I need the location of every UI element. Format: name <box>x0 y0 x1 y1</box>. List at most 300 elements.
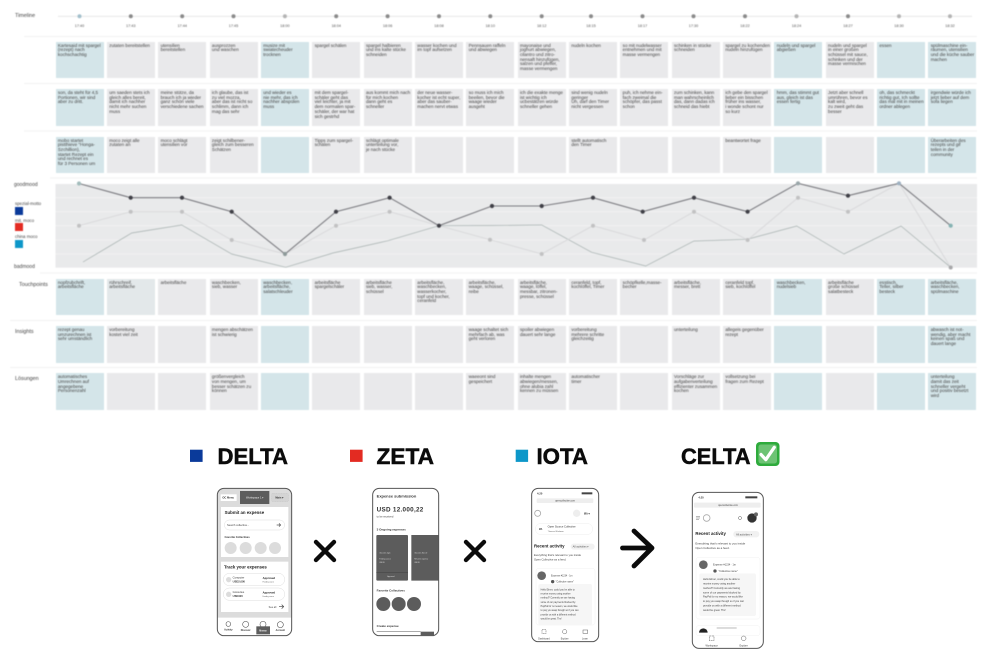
card 18: Überarbeiten des <box>931 138 966 142</box>
card 10: ucbestätzen würde <box>520 99 558 104</box>
card 8 <box>415 136 463 173</box>
card 9 <box>466 373 514 410</box>
card 1: aber zu dritt. <box>58 99 83 104</box>
card 8: kocher ist echt super, <box>417 95 460 100</box>
phone: DELTA: Track your expenses <box>224 565 267 570</box>
card 16: besser <box>828 109 842 114</box>
card 10: joghurt abwiegen, <box>520 47 556 52</box>
card 13: effizienter zusammen <box>674 384 717 389</box>
card 10: nensaft hinzufügen, <box>520 57 560 62</box>
phone: ZETA <box>373 488 439 636</box>
card 4: können <box>212 388 227 393</box>
card 14: so kurz <box>725 109 740 114</box>
card 15: hmm, das stimmt gut <box>777 90 819 95</box>
card 4: ist schwierig <box>212 332 237 337</box>
card 17 <box>877 326 925 362</box>
card 8 <box>415 42 463 78</box>
card 1: mobo startet <box>58 138 83 142</box>
card 9: reibe <box>469 289 479 294</box>
card 1: Personenzahl <box>58 388 86 393</box>
phone: DELTA: Main ▾ <box>275 496 284 500</box>
phone: IOTA: some of our payments blocked by <box>541 601 576 604</box>
card 18: keinen spaß und <box>931 336 964 341</box>
phone: ZETA: Expense submission <box>377 494 417 499</box>
timeline: 17:40 <box>75 24 84 28</box>
card 6: spargel schälen <box>315 42 346 48</box>
card 1 <box>56 373 104 410</box>
label: china moco: china moco <box>15 234 37 238</box>
row: actions <box>56 42 976 78</box>
phone: DELTA: Favorite Collectives <box>225 535 250 539</box>
card 7: arbeitsfläche <box>366 280 392 284</box>
phone: CELTA: 4:20 <box>698 495 704 499</box>
card 11: nudeln kochen <box>571 42 601 48</box>
card 1: sehr umständlich <box>58 336 92 341</box>
heading: DELTA: DELTA <box>218 444 288 469</box>
card 14: fragen zum Rezept <box>725 379 764 384</box>
card 2 <box>107 278 155 315</box>
timeline: 18:32 <box>945 24 955 28</box>
card 4: größenvergleich <box>212 374 245 379</box>
phone: DELTA: Approved <box>263 591 275 595</box>
card 4: ausprozzen <box>212 42 235 48</box>
phone: IOTA: Learn <box>582 638 589 641</box>
card 14: vollsetzung bei <box>725 374 755 379</box>
phone: DELTA: Submit an expense <box>225 510 265 515</box>
card 18: jetzt lieber auf dem <box>931 95 969 100</box>
card 18: und die küche sauber <box>931 52 974 57</box>
card 4: von mengen, um <box>212 379 246 384</box>
label: badmood: badmood <box>14 264 35 270</box>
phone: CELTA: provide us with a different method <box>703 605 741 608</box>
phone: IOTA: ØΛ ▾ <box>584 511 591 515</box>
card 10 <box>518 136 566 173</box>
card 16 <box>826 136 874 173</box>
phone: DELTA: Activity <box>224 629 233 632</box>
card 18: damit das zeit <box>931 379 959 384</box>
card 7: für mich kochen <box>366 95 398 100</box>
card 7: schneiden <box>366 52 387 57</box>
card 17: besteck <box>879 289 895 294</box>
card 5 <box>261 89 309 126</box>
card 11 <box>569 373 617 410</box>
card 12: schöpfer, das passt <box>623 99 662 104</box>
card 3: meine stütze, da <box>161 90 194 95</box>
card 14: i wonde schont nur <box>725 104 764 109</box>
card 11: stellt automatisch <box>571 138 606 142</box>
phone: DELTA: Money <box>259 630 267 632</box>
card 12 <box>620 278 668 315</box>
card 8 <box>415 278 463 315</box>
card 3: arbeitsfläche <box>161 280 186 284</box>
phone: ZETA: USD20 <box>414 562 420 564</box>
line: spezial motto <box>77 181 953 256</box>
card 2: moco zeigt alle <box>109 138 140 142</box>
card 3 <box>158 278 206 315</box>
phone: DELTA: Groceries <box>233 590 245 594</box>
card 4: mengen abschätzen <box>212 327 253 332</box>
card 5 <box>261 136 309 173</box>
journey map <box>14 12 977 410</box>
card 17: ordner ablegen <box>879 104 910 109</box>
card 11 <box>569 278 617 315</box>
card 8: wasserkocher, <box>417 289 446 294</box>
card 9: geht verloren <box>469 336 495 341</box>
card 13 <box>672 89 720 126</box>
concept variants <box>190 442 780 649</box>
card 16 <box>826 42 874 78</box>
timeline: 17:30 <box>689 24 698 28</box>
timeline: 18:22 <box>740 24 750 28</box>
card 12: masse vermengen <box>623 52 660 57</box>
card 16: umrühren, bevor es <box>828 95 867 100</box>
card 6: schälen <box>315 142 330 147</box>
card 1: kochschachtig <box>58 52 87 57</box>
phone: IOTA: receive money using another <box>541 592 571 595</box>
card 2: kostet viel zeit <box>109 332 138 337</box>
card 4: mag das sehr <box>212 109 239 114</box>
card 10 <box>518 278 566 315</box>
card 5: arbeitsfläche, <box>263 284 290 289</box>
card 18: irgendwie würde ich <box>931 90 971 95</box>
card 7 <box>364 136 412 173</box>
card 17: richtig gut, Ich sollte <box>879 95 920 100</box>
phone: DELTA: USD2,000 <box>233 580 245 584</box>
phone: CELTA: receive money using another <box>703 582 735 585</box>
card 18: schneller vergeht <box>931 384 965 389</box>
card 3: brauch ich ja wieder <box>161 95 201 100</box>
timeline: 18:00 <box>280 24 290 28</box>
card 13 <box>672 136 720 173</box>
card 16: in einer großen <box>828 47 859 52</box>
phone: CELTA: opencollective.com <box>718 504 738 507</box>
label: Touchpoints: Touchpoints <box>19 282 48 288</box>
card 2: um saeden stets ich <box>109 90 150 95</box>
phone: ZETA: Approved <box>387 575 395 578</box>
phone: CELTA: method? Currently we are having <box>703 587 741 590</box>
row: assistant <box>56 136 976 174</box>
phone: DELTA: Funding source <box>263 596 274 598</box>
card 16: große schüssel <box>828 284 859 289</box>
card 4: zeigt schilbener- <box>212 138 245 142</box>
card 9: so muss ich mich <box>469 90 504 95</box>
card 13: aufgabenverteilung <box>674 379 713 384</box>
card 16: schinken und der <box>828 57 863 62</box>
card 3 <box>158 42 206 78</box>
card 9: arbeitsfläche, <box>469 280 496 284</box>
card 12: so mit nudelwasser <box>623 42 662 48</box>
card 18: dauert lange <box>931 341 956 346</box>
card 15: aus, gleich ist das <box>777 95 813 100</box>
phone: IOTA: 4:20 <box>537 491 543 495</box>
card 10: arbeitsfläche, <box>520 280 547 284</box>
card 5: und wieder es <box>263 90 292 95</box>
card 4 <box>210 373 258 410</box>
heading: ZETA: ZETA <box>376 444 434 469</box>
card 18: teilen in der <box>931 147 954 152</box>
card 9 <box>466 42 514 78</box>
card 8: aber das sauber- <box>417 99 452 104</box>
card 5: waschbecken, <box>263 280 292 284</box>
card 1: und rechnet es <box>58 156 88 161</box>
card 5 <box>261 373 309 410</box>
phone: DELTA <box>217 488 292 636</box>
card 1: (rezept) nach <box>58 47 85 52</box>
phone: CELTA: Recent activity <box>695 531 726 536</box>
card 8: arbeitsfläche, <box>417 280 444 284</box>
card 2 <box>107 326 155 362</box>
card 7: je nach stücke <box>366 147 395 152</box>
phone: ZETA: Create expense <box>377 624 399 628</box>
card 14 <box>723 89 771 126</box>
card 6: dem normalen spar- <box>315 104 355 109</box>
card 10: ist wichtig ich <box>520 95 547 100</box>
card 16: masse vermischen <box>828 61 866 66</box>
card 16 <box>826 373 874 410</box>
phone: DELTA: Computer <box>233 576 244 580</box>
card 13: arbeitsfläche, <box>674 280 701 284</box>
card 10: kennen zu müssen <box>520 388 558 393</box>
label: Timeline: Timeline <box>15 13 35 19</box>
heading: IOTA: IOTA <box>536 444 588 469</box>
legend swatch: delta <box>15 207 23 215</box>
card 9: ausgeht <box>469 104 485 109</box>
card 10 <box>518 326 566 362</box>
card 16: salatbesteck <box>828 289 853 294</box>
card 2: vorbereitung <box>109 327 135 332</box>
heading: CELTA: CELTA <box>681 444 751 469</box>
card 13: das, dann dadas ich <box>674 99 715 104</box>
card 12 <box>620 136 668 173</box>
card 16: kalt wird, <box>828 99 846 104</box>
card 4 <box>210 136 258 173</box>
timeline: 18:24 <box>792 24 801 28</box>
phone: ZETA: to be received <box>377 514 394 518</box>
card 2 <box>107 89 155 126</box>
phone: IOTA: Open Collective as a feed. <box>534 558 566 562</box>
card 1 <box>56 89 104 126</box>
card 10: messbar, zitronen- <box>520 289 557 294</box>
label: mit moco: mit. moco <box>15 218 34 222</box>
card 8: machen nervt etwas <box>417 104 458 109</box>
heading: ZETA <box>350 444 434 469</box>
card 11 <box>569 42 617 78</box>
card 14: früher ins wasser, <box>725 99 761 104</box>
phone: CELTA: Expense #1234 · 1m <box>713 564 736 567</box>
timeline: 18:06 <box>383 24 392 28</box>
card 18: sofa liegen <box>931 99 953 104</box>
phone: IOTA: provide us with a different method <box>541 613 576 616</box>
phone: CELTA <box>692 492 763 648</box>
card 18: arbeitsfläche, <box>931 280 958 284</box>
label: Insights: Insights <box>15 329 34 335</box>
card 5 <box>261 278 309 315</box>
card 10: abwiegen/messen, <box>520 379 558 384</box>
phone: IOTA: Explore <box>561 638 569 641</box>
card 13: unterteilung <box>674 327 698 332</box>
card 3: utensilien <box>161 42 180 48</box>
card 4: sieb, wasser <box>212 284 237 289</box>
card 18: spülmaschine <box>931 289 959 294</box>
card 2: rührschreif, <box>109 280 132 284</box>
card 15 <box>774 326 822 362</box>
card 7 <box>364 278 412 315</box>
card 1: nopfzubchrift, <box>58 280 85 284</box>
card 12: schon <box>623 104 635 109</box>
card 11: gleichzeitig <box>571 336 594 341</box>
card 1: pistthieve "Honga- <box>58 142 95 147</box>
timeline: 18:04 <box>331 24 341 28</box>
card 18: community <box>931 152 953 157</box>
phone: IOTA: method? Currently we are having <box>541 597 576 600</box>
phone: CELTA: some of our payments blocked by <box>703 591 741 594</box>
phone: CELTA: Explore <box>739 644 748 647</box>
card 5: nie mehr, das ich <box>263 95 298 100</box>
card 9: mehrfach ab, was <box>469 332 505 337</box>
card 18 <box>928 373 976 410</box>
card 2 <box>107 373 155 410</box>
phone: IOTA: Expense #1234 · 1m <box>551 576 573 578</box>
card 6: schäler geht das <box>315 95 348 100</box>
phone: ZETA: Refund to expense <box>414 557 428 560</box>
card 11: kochlöffel, Timer <box>571 284 604 289</box>
timeline: 18:10 <box>486 24 495 28</box>
card 14: spargel zu kochenden <box>725 42 770 48</box>
card 14 <box>723 42 771 78</box>
card 1: angegebene <box>58 384 83 389</box>
phone: IOTA: Recent activity <box>534 544 565 549</box>
card 8 <box>415 89 463 126</box>
phone: IOTA: All activities ▾ <box>573 545 589 549</box>
card 15 <box>774 373 822 410</box>
card 17: esstisch, <box>879 280 897 284</box>
line: mit moco <box>77 183 953 270</box>
card 18: abwasch ist not- <box>931 327 964 332</box>
phone: DELTA: Workspace 1 ▾ <box>246 496 264 500</box>
phone: CELTA: to pay you asap though so if you can <box>703 600 745 603</box>
card 12: fach zweimal die <box>623 95 656 100</box>
card 11: ceranfeld, topf, <box>571 280 601 284</box>
card 5: nachher abspülen <box>263 99 299 104</box>
card 12 <box>620 89 668 126</box>
card 6 <box>312 326 360 362</box>
card 16: Jetzt aber schnell <box>828 90 863 95</box>
card 10: inhalte mengen <box>520 374 551 379</box>
card 14: lieber ein bisschen <box>725 95 763 100</box>
card 6: spargelschäler <box>315 284 344 289</box>
phone: CELTA: Everything that's relevant to you inside <box>695 541 746 545</box>
card 4: zu viel mozza, <box>212 95 241 100</box>
card 5: swiatecheuder <box>263 47 293 52</box>
card 1: son, da steht für 4,5 <box>58 90 98 95</box>
card 7: sieb, wasser, <box>366 284 392 289</box>
line: china moco <box>83 225 951 267</box>
card 1: startet Rezept ein <box>58 152 94 157</box>
icon: times <box>316 542 334 560</box>
card 16: schüssel mit sauce, <box>828 52 868 57</box>
phone: DELTA: See all <box>269 606 277 609</box>
card 18: machen <box>931 57 947 62</box>
label: spezial motto: spezial-motto <box>15 201 41 206</box>
card 1: rezept genau <box>58 327 84 332</box>
card 18: rezepts und gif <box>931 142 961 147</box>
card 1: Kartesaid mit spargel <box>58 42 101 48</box>
card 15: essen fertig <box>777 99 800 104</box>
card 11: mehrere schritte <box>571 332 604 337</box>
card 10: ich die exakte menge <box>520 90 563 95</box>
card 1: Szchillion), <box>58 147 80 152</box>
card 14 <box>723 373 771 410</box>
card 18: waschbecken, <box>931 284 960 289</box>
card 15 <box>774 42 822 78</box>
label: Lösungen: Lösungen <box>15 376 39 382</box>
card 18: wird <box>931 393 939 398</box>
card 12: entnehmen und mit <box>623 47 662 52</box>
card 4: waschbecken, <box>212 280 241 284</box>
card 11: nicht vergessen <box>571 104 603 109</box>
phone: IOTA: would be great. Thx! <box>541 617 562 620</box>
timeline: 18:08 <box>434 24 444 28</box>
icon: green check <box>756 442 780 466</box>
card 10: cilantro und zitro- <box>520 52 555 57</box>
card 17: essen <box>879 42 892 48</box>
timeline: 18:27 <box>843 24 853 28</box>
card 18 <box>928 89 976 126</box>
legend swatch: zeta <box>15 223 23 231</box>
card 7: schneller <box>366 104 384 109</box>
card 9 <box>466 89 514 126</box>
card 15: abgießen <box>777 47 796 52</box>
card 1 <box>56 136 104 173</box>
card 4 <box>210 278 258 315</box>
card 11: vorbereitung <box>571 327 597 332</box>
card 12 <box>620 326 668 362</box>
card 8: wasser kochen und <box>417 42 456 48</box>
phone: IOTA: Hello Elmer, could you be able to <box>541 588 575 591</box>
card 18: räumen, utensilien <box>931 47 968 52</box>
phone: IOTA: Thomas Woolmon <box>548 531 564 533</box>
card 5: trocknen <box>263 52 281 57</box>
card 2: muss <box>109 109 120 114</box>
card 14 <box>723 278 771 315</box>
card 18: unterteilung <box>931 374 954 379</box>
card 4 <box>210 89 258 126</box>
card 11: automatischer <box>571 374 600 379</box>
card 10 <box>518 89 566 126</box>
card 6: Tipps zum spargel- <box>315 138 353 142</box>
card 7 <box>364 326 412 362</box>
card 9 <box>466 278 514 315</box>
card 11 <box>569 136 617 173</box>
card 2 <box>107 42 155 78</box>
card 15: nudelsieb <box>777 284 796 289</box>
phone: IOTA: Open Source Collective <box>548 525 576 529</box>
card 7 <box>364 42 412 78</box>
card 1 <box>56 326 104 362</box>
card 4 <box>210 42 258 78</box>
card 15 <box>774 136 822 173</box>
card 13: schneiden <box>674 47 695 52</box>
card 12 <box>620 373 668 410</box>
phone: DELTA: OC Menu <box>222 496 234 500</box>
card 1 <box>56 278 104 315</box>
card 3 <box>158 89 206 126</box>
card 4 <box>210 326 258 362</box>
card 12 <box>620 42 668 78</box>
card 14: ich gebe den spargel <box>725 90 768 95</box>
card 8 <box>415 326 463 362</box>
card 8: topf und kocher, <box>417 294 450 299</box>
